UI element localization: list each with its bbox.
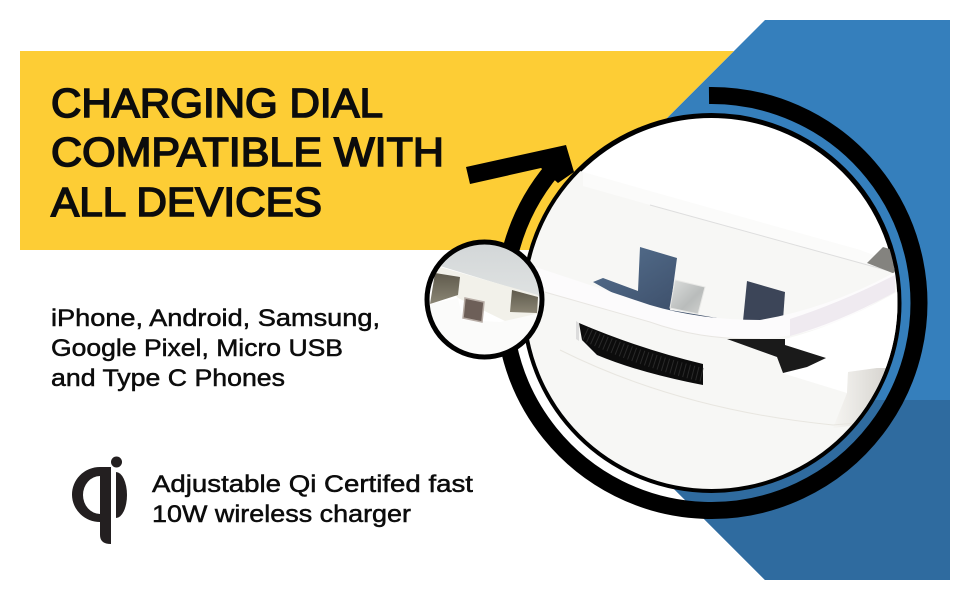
grey back panel [440, 244, 540, 296]
arrow: circular arc with arrowhead [466, 95, 919, 510]
white area right of clip [782, 290, 900, 393]
heading [51, 80, 444, 225]
heading: ALL DEVICES [51, 179, 322, 225]
compatible devices text: and Type C Phones [51, 365, 285, 392]
compatible devices text: iPhone, Android, Samsung, [51, 305, 380, 332]
white plate [432, 267, 540, 321]
second slot block [743, 281, 785, 321]
blue slot [593, 247, 717, 325]
Qi charger text: Adjustable Qi Certifed fast [152, 471, 473, 498]
dial wheel [576, 321, 703, 385]
compatible devices text [51, 305, 380, 392]
compatible devices text: Google Pixel, Micro USB [51, 335, 343, 362]
left window [430, 273, 460, 304]
bottom white base [430, 304, 538, 321]
rear clip [867, 247, 895, 274]
small circle: micro USB close-up photo [425, 240, 545, 360]
front lip [610, 272, 895, 325]
Qi charger text: 10W wireless charger [152, 501, 411, 528]
side shading [841, 368, 886, 426]
yellow heading band [20, 51, 734, 250]
dock body [529, 171, 898, 489]
Qi charger text [152, 471, 473, 528]
heading: CHARGING DIAL [51, 80, 383, 126]
large circle: dial close-up photo [520, 116, 905, 500]
right window [510, 290, 538, 313]
heading: COMPATIBLE WITH [51, 129, 444, 175]
blue diamond background [666, 20, 950, 580]
icon: Qi logo [72, 456, 127, 544]
micro USB connector [463, 298, 484, 322]
black clip [727, 339, 826, 373]
connector [670, 280, 705, 314]
